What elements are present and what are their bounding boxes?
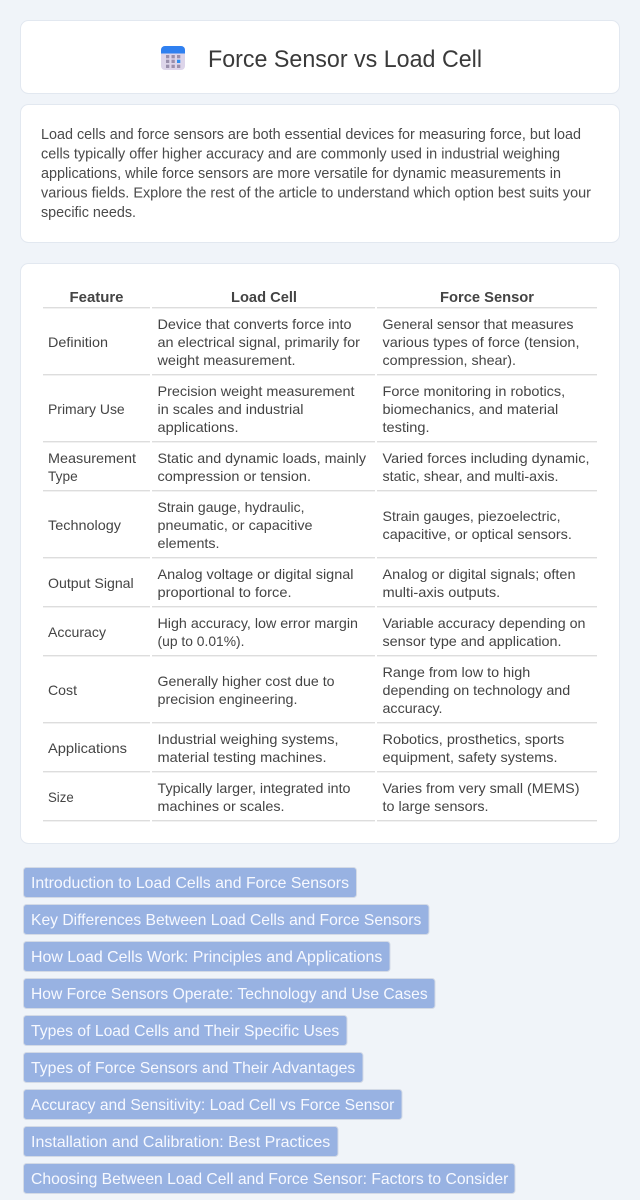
- icon: calendar: [161, 46, 185, 70]
- row: definition: General sensor that measures: [382, 316, 574, 332]
- row: measurement type: Varied forces including dynamic,: [382, 450, 590, 466]
- row: cost: depending on technology and: [382, 682, 570, 698]
- link: how force sensors operate: How Force Sensors Operate: Technology and Use Cases: [31, 986, 428, 1003]
- row: cost: Range from low to high: [382, 664, 530, 680]
- section links list: [24, 868, 515, 1194]
- row: size: to large sensors.: [382, 798, 488, 814]
- title: Force Sensor vs Load Cell: [208, 46, 482, 73]
- table header: Force Sensor: [440, 289, 534, 306]
- link: installation and calibration: [24, 1126, 338, 1156]
- link: accuracy and sensitivity: [24, 1090, 402, 1120]
- row: applications: material testing machines.: [158, 749, 326, 765]
- row: primary use: Precision weight measurement: [158, 383, 355, 399]
- row: cost: precision engineering.: [158, 691, 298, 707]
- row: primary use: applications.: [158, 419, 238, 435]
- row: output signal: [43, 566, 597, 607]
- link: introduction: Introduction to Load Cells and Force Sensors: [31, 875, 349, 892]
- row: accuracy: [43, 615, 597, 656]
- intro text: Load cells and force sensors are both essential devices for measuring force, but load: [41, 127, 581, 143]
- row: definition: Definition: [48, 334, 108, 350]
- row: definition: [43, 316, 597, 375]
- table header: Feature: [70, 289, 124, 306]
- row: size: Size: [48, 789, 74, 805]
- row: applications: Robotics, prosthetics, sports: [382, 731, 564, 747]
- intro text: specific needs.: [41, 205, 136, 221]
- row: technology: pneumatic, or capacitive: [158, 517, 313, 533]
- row: measurement type: Type: [48, 468, 78, 484]
- row: output signal: Analog voltage or digital signal: [158, 566, 354, 582]
- panel: introduction: [20, 104, 620, 242]
- intro text: various fields. Explore the rest of the article to understand which option best suits your: [41, 186, 591, 202]
- row: primary use: in scales and industrial: [158, 401, 304, 417]
- row: measurement type: static, shear, and multi-axis.: [382, 468, 558, 484]
- row: definition: Device that converts force into: [158, 316, 352, 332]
- row: measurement type: Static and dynamic loads, mainly: [158, 450, 366, 466]
- row: size: Typically larger, integrated into: [158, 780, 351, 796]
- row: cost: Cost: [48, 682, 77, 698]
- row: measurement type: compression or tension.: [158, 468, 311, 484]
- table header: Load Cell: [231, 289, 297, 306]
- row: definition: various types of force (tension,: [382, 334, 580, 350]
- row: output signal: multi-axis outputs.: [382, 584, 500, 600]
- row: applications: Industrial weighing systems,: [158, 731, 338, 747]
- intro text: applications, while force sensors are more versatile for dynamic measurements in: [41, 166, 561, 182]
- link: how load cells work: [24, 942, 390, 972]
- link: key differences: [24, 904, 429, 934]
- link: introduction: [24, 868, 356, 898]
- row: technology: Strain gauges, piezoelectric,: [382, 508, 560, 524]
- link: key differences: Key Differences Between Load Cells and Force Sensors: [31, 912, 421, 929]
- link: how load cells work: How Load Cells Work: Principles and Applications: [31, 949, 382, 966]
- row: primary use: testing.: [382, 419, 430, 435]
- link: choosing between: Choosing Between Load Cell and Force Sensor: Factors to Consider: [31, 1171, 509, 1188]
- row: primary use: [43, 383, 597, 442]
- link: installation and calibration: Installation and Calibration: Best Practices: [31, 1134, 330, 1151]
- row: definition: compression, shear).: [382, 352, 516, 368]
- row: accuracy: Variable accuracy depending on: [382, 615, 586, 631]
- row: cost: Generally higher cost due to: [158, 673, 335, 689]
- row: primary use: Force monitoring in robotics,: [382, 383, 565, 399]
- row: accuracy: (up to 0.01%).: [158, 633, 244, 649]
- intro text: [41, 127, 591, 221]
- panel: comparison table: [20, 264, 620, 844]
- row: accuracy: High accuracy, low error margin: [158, 615, 358, 631]
- row: definition: an electrical signal, primarily for: [158, 334, 360, 350]
- link: choosing between: [24, 1164, 515, 1194]
- row: technology: elements.: [158, 535, 220, 551]
- row: definition: weight measurement.: [156, 352, 296, 368]
- link: types of force sensors: Types of Force Sensors and Their Advantages: [31, 1060, 355, 1077]
- row: applications: Applications: [48, 740, 127, 756]
- row: output signal: proportional to force.: [158, 584, 292, 600]
- row: accuracy: Accuracy: [48, 624, 106, 640]
- row: output signal: Output Signal: [48, 575, 134, 591]
- row: technology: Technology: [48, 517, 121, 533]
- row: measurement type: Measurement: [48, 450, 136, 466]
- row: size: Varies from very small (MEMS): [382, 780, 580, 796]
- row: output signal: Analog or digital signals; often: [382, 566, 576, 582]
- row: applications: equipment, safety systems.: [382, 749, 558, 765]
- row: cost: accuracy.: [382, 700, 442, 716]
- row: accuracy: sensor type and application.: [382, 633, 562, 649]
- link: types of force sensors: [24, 1052, 363, 1082]
- link: types of load cells: [24, 1016, 347, 1046]
- row: measurement type: [43, 450, 597, 491]
- row: cost: [43, 664, 597, 723]
- link: types of load cells: Types of Load Cells and Their Specific Uses: [31, 1023, 339, 1040]
- row: size: [43, 780, 597, 821]
- row: applications: [43, 731, 597, 772]
- row: technology: [43, 499, 597, 558]
- row: size: machines or scales.: [158, 798, 284, 814]
- table header: [43, 289, 597, 308]
- row: technology: capacitive, or optical sensors.: [382, 526, 572, 542]
- row: primary use: Primary Use: [48, 401, 125, 417]
- link: how force sensors operate: [24, 978, 435, 1008]
- intro text: cells typically offer higher accuracy and are commonly used in industrial weighing: [41, 146, 560, 162]
- panel: title card: [20, 20, 620, 94]
- row: primary use: biomechanics, and material: [382, 401, 558, 417]
- row: technology: Strain gauge, hydraulic,: [158, 499, 304, 515]
- link: accuracy and sensitivity: Accuracy and Sensitivity: Load Cell vs Force Sensor: [31, 1097, 395, 1114]
